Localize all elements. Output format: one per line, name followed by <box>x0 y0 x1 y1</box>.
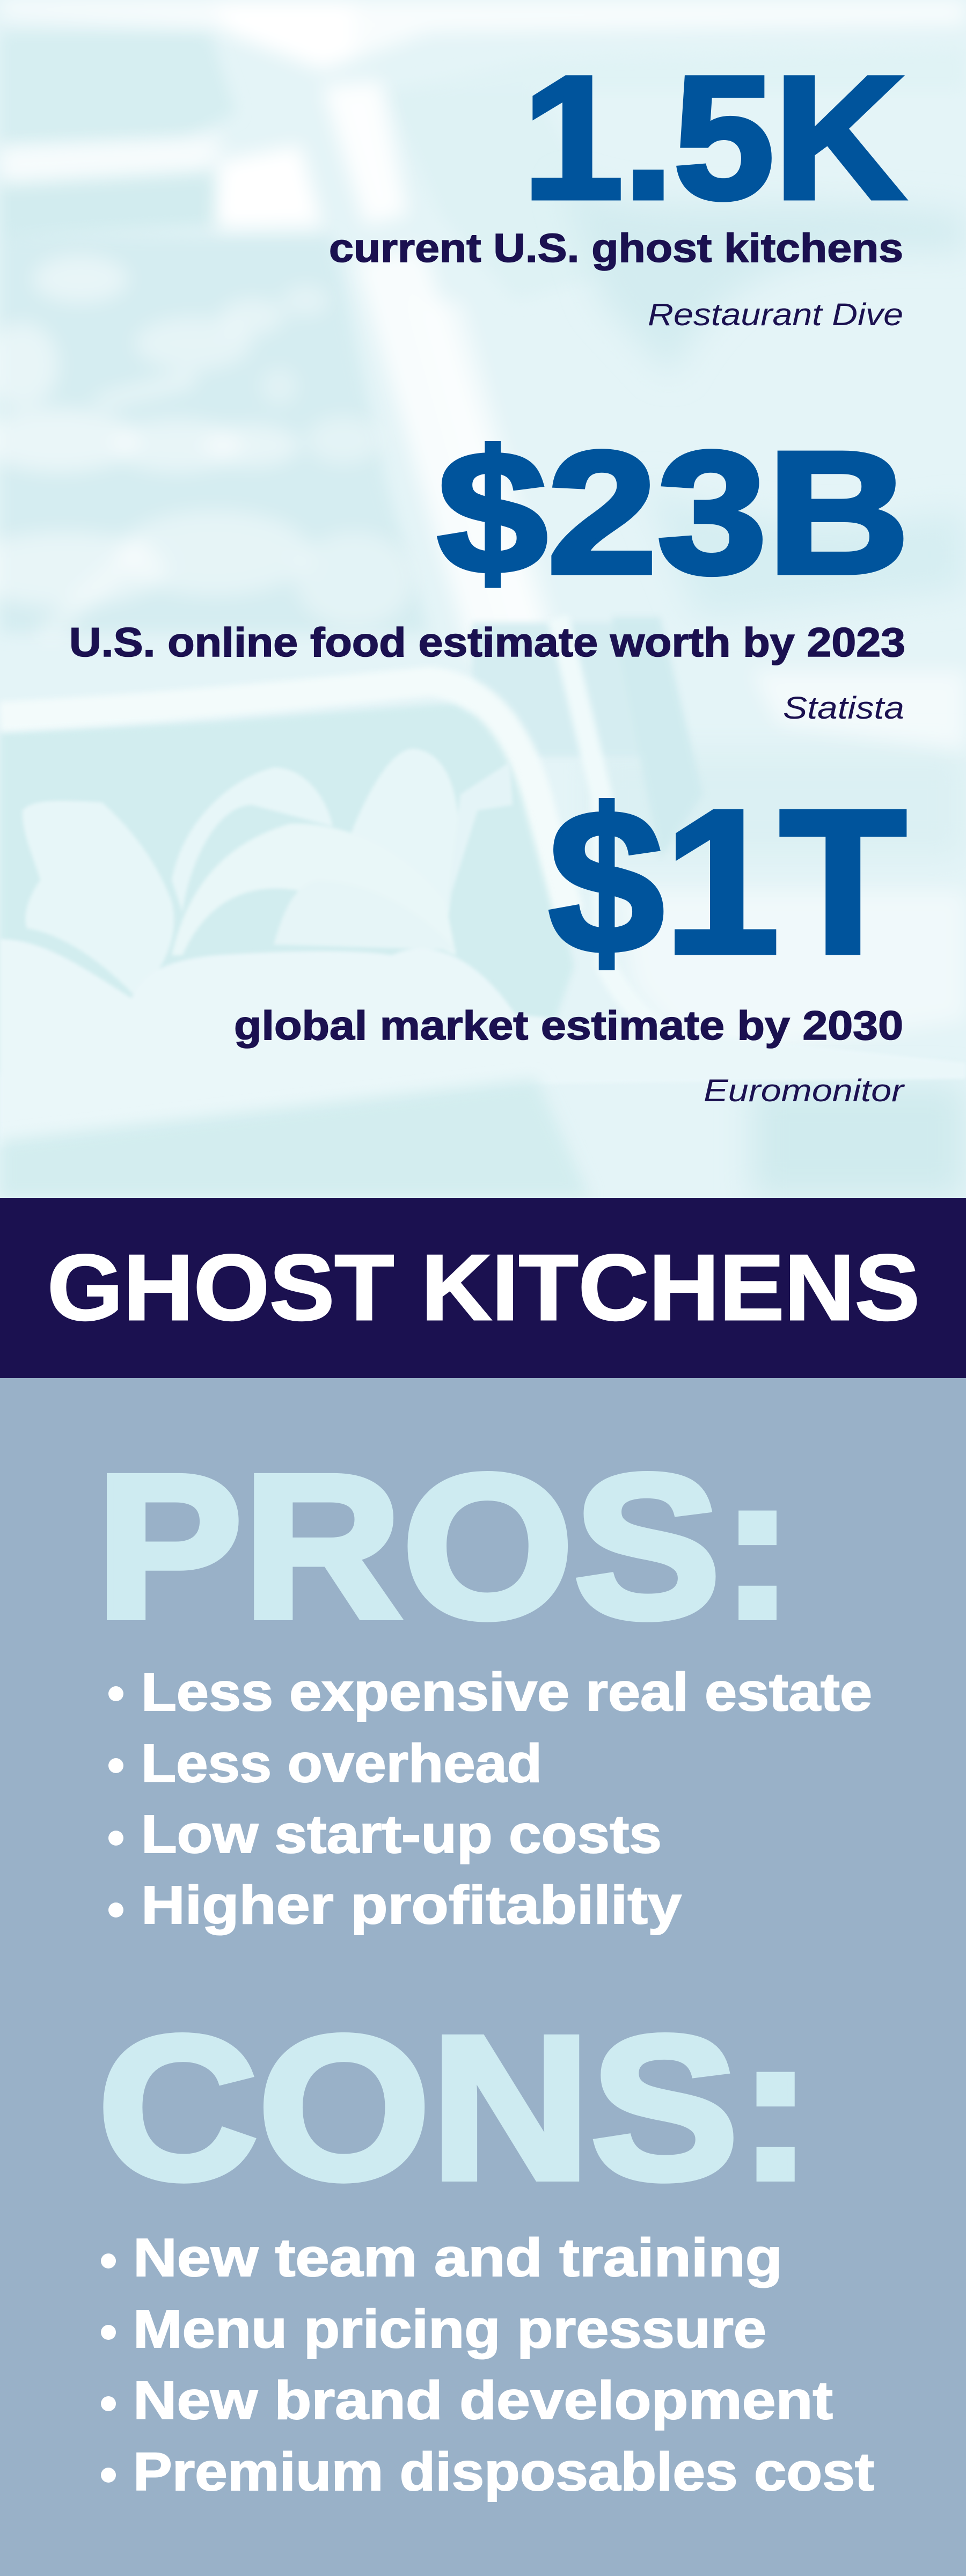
stat: $23B U.S. online food estimate <box>69 415 910 726</box>
title banner <box>0 1198 966 1378</box>
list: pros: Less overhead <box>141 1733 542 1794</box>
list: cons: Menu pricing pressure <box>133 2299 766 2359</box>
heading: PROS: PROS: <box>96 1432 794 1660</box>
stat: 1.5K current U.S. ghost kitchens <box>329 40 905 332</box>
stat label: U.S. online food estimate worth by 2023 <box>69 620 905 665</box>
list: pros <box>108 1662 872 1935</box>
source: Euromonitor: Euromonitor <box>704 1073 905 1108</box>
stat number: $1T: $1T <box>548 767 906 996</box>
source: Statista: Statista <box>783 691 904 726</box>
heading: CONS: CONS: <box>98 1993 813 2222</box>
list: cons <box>101 2228 874 2502</box>
stat number: $23B: $23B <box>437 415 910 610</box>
panel: pros and cons <box>0 1378 966 2576</box>
panel: pale food photo background <box>0 0 966 1198</box>
source: Restaurant Dive: Restaurant Dive <box>648 297 903 332</box>
stat number: 1.5K: 1.5K <box>523 40 905 236</box>
stat label: global market estimate by 2030 <box>234 1003 903 1049</box>
list: pros: Less expensive real estate <box>141 1662 872 1722</box>
list: cons: Premium disposables cost <box>133 2442 874 2502</box>
title: GHOST KITCHENS: GHOST KITCHENS <box>47 1235 920 1340</box>
list: pros: Higher profitability <box>141 1875 682 1935</box>
list: pros: Low start-up costs <box>141 1804 662 1864</box>
list: cons: New brand development <box>133 2370 833 2431</box>
stat: $1T global market estimate <box>234 767 906 1108</box>
list: cons: New team and training <box>133 2228 782 2288</box>
stat label: current U.S. ghost kitchens <box>329 225 903 270</box>
